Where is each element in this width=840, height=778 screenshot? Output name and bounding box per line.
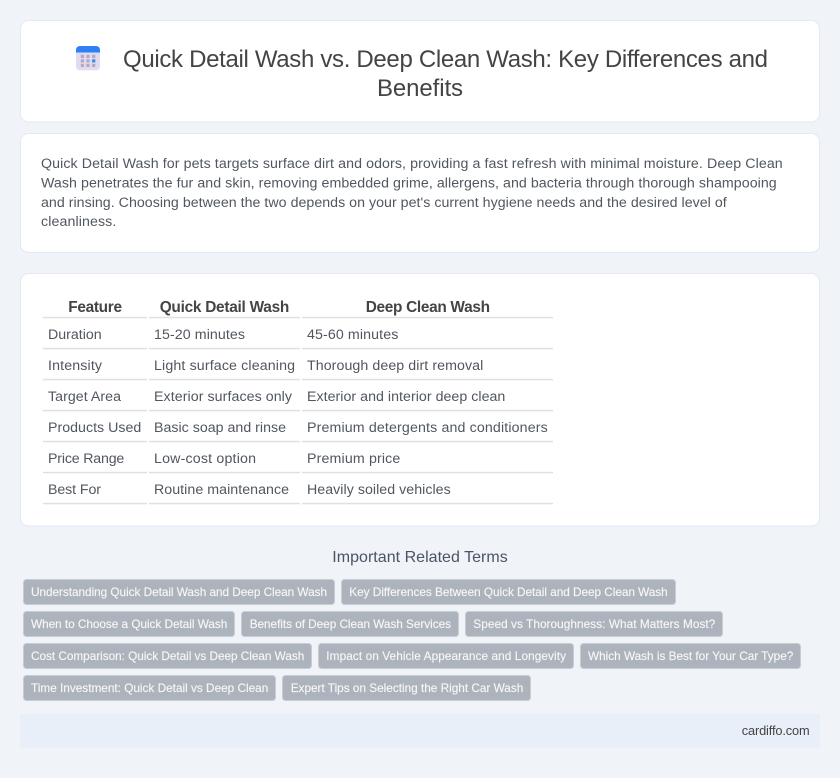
- tag: [24, 612, 234, 636]
- table header row: [43, 299, 553, 318]
- row: duration: Duration: [48, 327, 102, 343]
- tag: [24, 580, 334, 604]
- tag: [24, 644, 312, 668]
- tag: [466, 612, 722, 636]
- row: duration: 15-20 minutes: [154, 327, 245, 343]
- row: price range: Price Range: [48, 451, 124, 467]
- row: products used: Products Used: [48, 420, 141, 436]
- row: target area: Exterior surfaces only: [154, 389, 293, 405]
- footer band: [20, 714, 820, 748]
- row: duration: [43, 327, 553, 349]
- tag: [282, 676, 530, 700]
- intro text: Quick Detail Wash for pets targets surface dirt and odors, providing a fast refresh with minimal moisture. Deep Clean: [41, 156, 783, 172]
- row: products used: Premium detergents and conditioners: [307, 420, 548, 436]
- intro text: Wash penetrates the fur and skin, removing embedded grime, allergens, and bacteria through thorough shampooing: [41, 175, 777, 191]
- tag: Expert Tips on Selecting the Right Car Wash: [291, 681, 523, 695]
- row: intensity: Light surface cleaning: [154, 358, 295, 374]
- tag: Speed vs Thoroughness: What Matters Most?: [473, 617, 716, 631]
- tag: [580, 644, 800, 668]
- row: price range: Premium price: [307, 451, 400, 467]
- related terms tags: [24, 580, 800, 700]
- tag: Impact on Vehicle Appearance and Longevity: [326, 649, 566, 663]
- panel: introduction: [20, 134, 820, 252]
- row: intensity: Intensity: [48, 358, 103, 374]
- row: price range: [43, 451, 553, 473]
- icon: calendar: [76, 46, 100, 70]
- row: target area: Exterior and interior deep clean: [307, 389, 505, 405]
- intro text: and rinsing. Choosing between the two depends on your pet's current hygiene needs and the desired level of: [41, 195, 727, 211]
- tag: Time Investment: Quick Detail vs Deep Clean: [31, 681, 268, 695]
- row: duration: 45-60 minutes: [307, 327, 398, 343]
- tag: [342, 580, 676, 604]
- tag: Key Differences Between Quick Detail and Deep Clean Wash: [349, 585, 668, 599]
- row: best for: Heavily soiled vehicles: [307, 482, 451, 498]
- row: target area: [43, 389, 553, 411]
- table header row: Feature: [68, 299, 122, 316]
- row: intensity: Thorough deep dirt removal: [307, 358, 483, 374]
- tag: [24, 676, 276, 700]
- row: best for: [43, 482, 553, 504]
- row: products used: Basic soap and rinse: [154, 420, 286, 436]
- tag: [242, 612, 458, 636]
- tag: Benefits of Deep Clean Wash Services: [250, 617, 451, 631]
- related terms heading: Important Related Terms: [332, 549, 508, 566]
- row: best for: Best For: [48, 482, 101, 498]
- table header row: Quick Detail Wash: [160, 299, 289, 316]
- row: products used: [43, 420, 553, 442]
- tag: When to Choose a Quick Detail Wash: [31, 617, 227, 631]
- footer source text: cardiffo.com: [742, 723, 810, 738]
- row: intensity: [43, 358, 553, 380]
- intro text: cleanliness.: [41, 214, 116, 230]
- tag: Cost Comparison: Quick Detail vs Deep Clean Wash: [31, 649, 304, 663]
- tag: [318, 644, 574, 668]
- row: target area: Target Area: [48, 389, 121, 405]
- row: price range: Low-cost option: [154, 451, 256, 467]
- panel: comparison table: [20, 274, 820, 526]
- title: Quick Detail Wash vs. Deep Clean Wash: Key Differences and: [123, 46, 768, 73]
- title: Benefits: [377, 75, 463, 102]
- row: best for: Routine maintenance: [154, 482, 289, 498]
- tag: Understanding Quick Detail Wash and Deep Clean Wash: [31, 585, 327, 599]
- title: [123, 46, 768, 102]
- table header row: Deep Clean Wash: [366, 299, 490, 316]
- tag: Which Wash is Best for Your Car Type?: [588, 649, 794, 663]
- intro text: [41, 156, 783, 230]
- panel: header: [20, 20, 820, 122]
